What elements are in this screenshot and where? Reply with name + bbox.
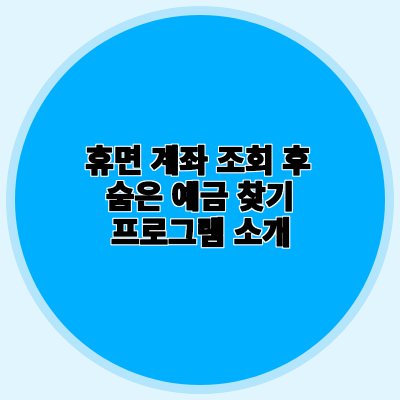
title — [85, 144, 311, 251]
title: 숨은 예금 찾기 — [106, 180, 294, 215]
title: 휴면 계좌 조회 후 — [85, 144, 311, 179]
title: 프로그램 소개 — [111, 216, 291, 251]
